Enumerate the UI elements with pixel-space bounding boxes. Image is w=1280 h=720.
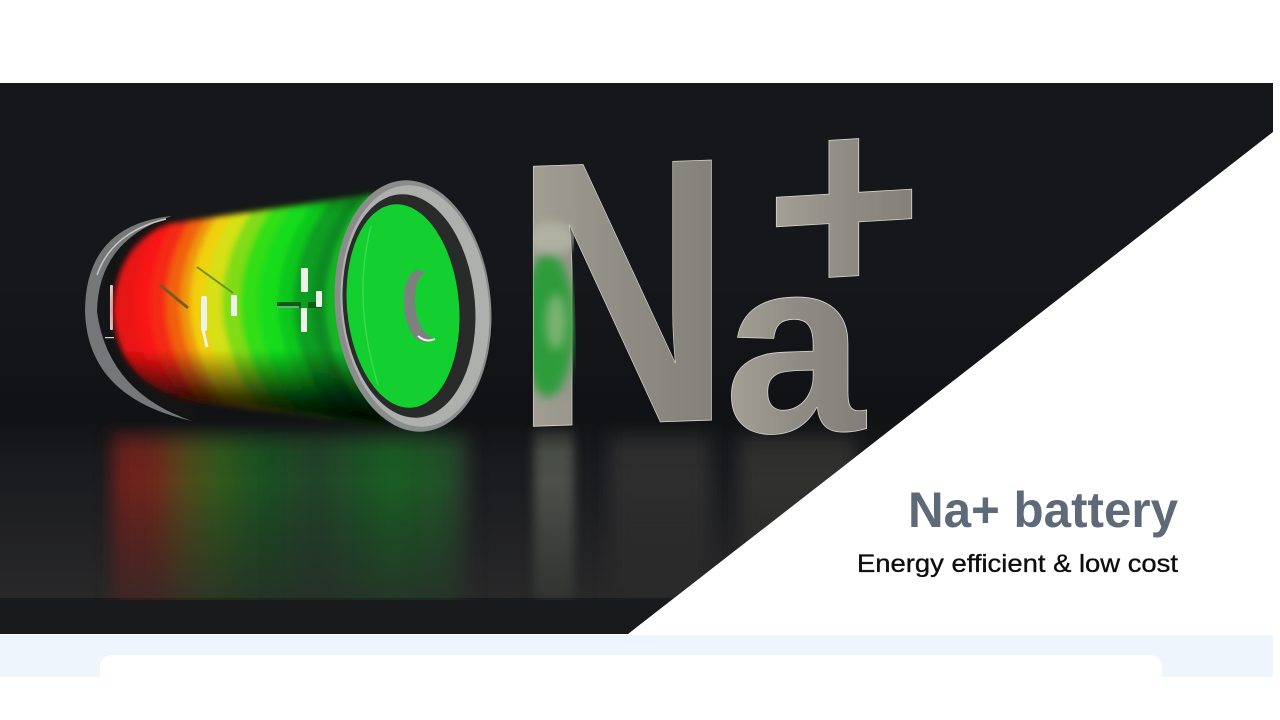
- battery charge body red to green: [100, 190, 400, 425]
- floor reflections of battery and letters: [112, 425, 855, 615]
- Na+ metal letters: [532, 138, 912, 435]
- battery: [85, 174, 502, 438]
- letter N: N: [513, 77, 732, 508]
- plus sign: +: [765, 49, 923, 360]
- heading text block: [857, 482, 1178, 578]
- letter a: a: [724, 204, 867, 486]
- subheading: Energy efficient & low cost: [857, 550, 1178, 578]
- green glow on N stem: [533, 220, 576, 404]
- bottom white strip: [0, 677, 1280, 720]
- battery rear rim: [85, 216, 195, 421]
- white rounded card: [100, 655, 1162, 720]
- light blue band: [0, 635, 1273, 677]
- battery green end cap: [346, 204, 460, 408]
- battery contact glints: [160, 267, 322, 347]
- battery front glass ring: [334, 180, 492, 432]
- heading: Na+ battery: [908, 482, 1178, 538]
